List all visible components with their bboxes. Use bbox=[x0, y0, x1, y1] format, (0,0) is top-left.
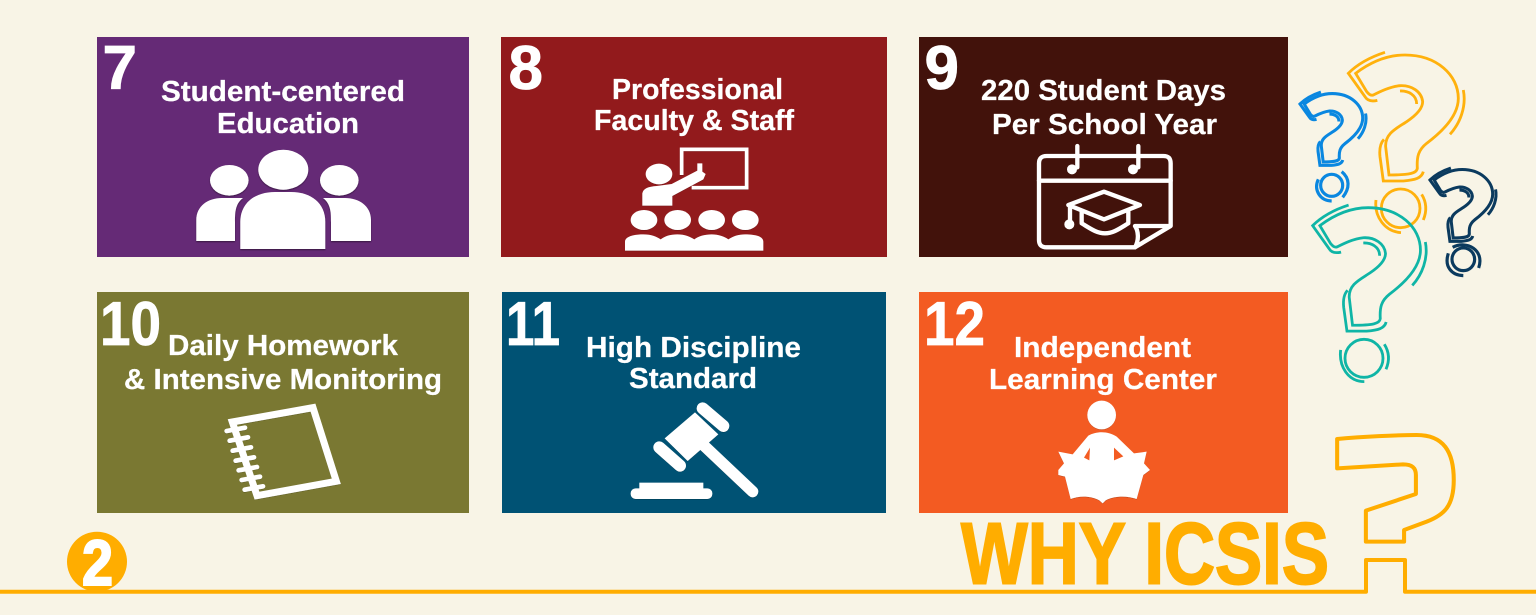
panel 9: 220 student days bbox=[919, 34, 1288, 257]
heading: daily homework and intensive monitoring: Daily Homework bbox=[168, 330, 399, 362]
number 8: 8 bbox=[508, 34, 543, 103]
number 10: 10 bbox=[100, 290, 161, 359]
heading: professional faculty and staff: Professional bbox=[612, 74, 783, 106]
icon: calendar with graduation cap bbox=[1039, 146, 1171, 247]
heading: professional faculty and staff bbox=[594, 74, 794, 137]
icon: navy question mark bbox=[1430, 168, 1496, 276]
heading: daily homework and intensive monitoring: & Intensive Monitoring bbox=[124, 364, 442, 396]
number 11: 11 bbox=[506, 290, 560, 359]
panel 11: high discipline standard bbox=[502, 290, 886, 513]
icon: spiral notebook bbox=[227, 408, 336, 496]
heading: high discipline standard: High Discipline bbox=[586, 332, 801, 364]
heading: high discipline standard: Standard bbox=[629, 363, 757, 395]
panel 8: professional faculty and staff bbox=[501, 34, 887, 257]
panel 7: student-centered education bbox=[97, 34, 469, 257]
panel 10: daily homework bbox=[97, 290, 469, 513]
icon: three people bbox=[196, 150, 371, 249]
heading: student-centered education bbox=[161, 76, 405, 140]
icon: person reading a book bbox=[1058, 401, 1150, 503]
heading: professional faculty and staff: Faculty & Staff bbox=[594, 105, 794, 137]
icon: yellow question mark bbox=[1348, 52, 1464, 233]
icon: teal question mark bbox=[1313, 205, 1426, 382]
baseline rule with question mark outline bbox=[0, 435, 1536, 592]
heading: student-centered education: Education bbox=[217, 108, 359, 140]
heading: daily homework and intensive monitoring bbox=[124, 330, 442, 396]
icon: teacher and students bbox=[625, 149, 763, 251]
heading: independent learning center bbox=[989, 332, 1217, 396]
heading: independent learning center: Learning Center bbox=[989, 364, 1217, 396]
heading: 220 student days per school year bbox=[981, 75, 1226, 141]
heading: student-centered education: Student-centered bbox=[161, 76, 405, 108]
heading: high discipline standard bbox=[586, 332, 801, 395]
heading: 220 student days per school year: Per School Year bbox=[992, 109, 1217, 141]
title: why icsis: WHY ICSIS bbox=[961, 506, 1329, 602]
number 7: 7 bbox=[102, 34, 137, 103]
heading: 220 student days per school year: 220 Student Days bbox=[981, 75, 1226, 107]
page number badge bbox=[67, 527, 127, 599]
icon: blue question mark bbox=[1300, 92, 1366, 201]
heading: independent learning center: Independent bbox=[1014, 332, 1191, 364]
number 9: 9 bbox=[924, 34, 959, 103]
panel 12: independent learning center bbox=[919, 290, 1288, 513]
icon: gavel bbox=[631, 408, 753, 499]
page number badge: 2 bbox=[82, 527, 113, 599]
number 12: 12 bbox=[924, 290, 985, 359]
